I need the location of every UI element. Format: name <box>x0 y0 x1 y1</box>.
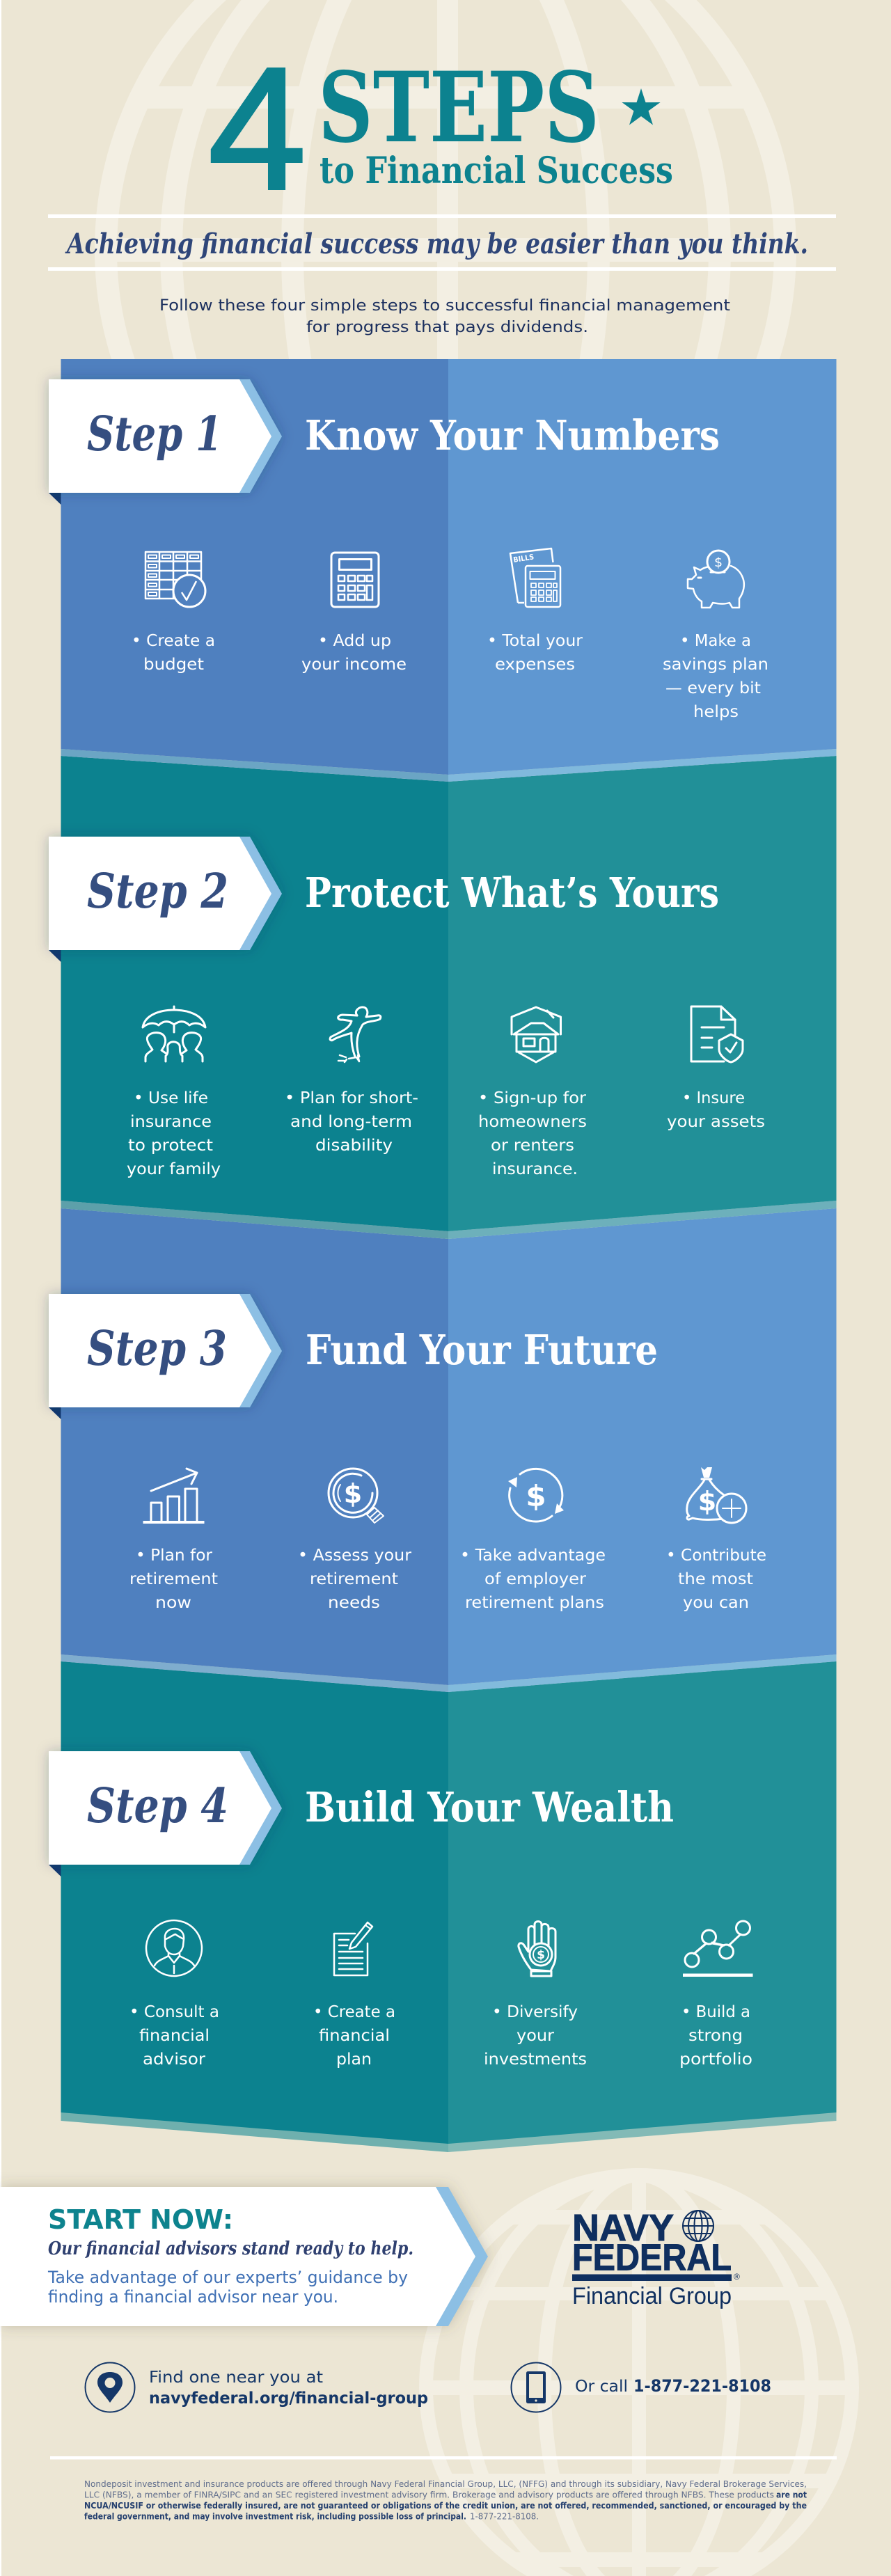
item: diversify your investments <box>484 1921 587 2069</box>
item: create a financial plan: • Create a <box>313 2003 395 2021</box>
background globe: top <box>95 0 796 359</box>
item: assess your retirement needs: • Assess your <box>298 1547 412 1565</box>
item: plan for disability: disability <box>315 1137 393 1155</box>
item: take advantage of employer retirement plans: retirement plans <box>465 1594 604 1612</box>
title: STEPS <box>318 50 599 164</box>
item: total your expenses: expenses <box>495 656 575 674</box>
disclosure fine print: are not <box>776 2489 807 2500</box>
disclosure fine print: NCUA/NCUSIF or otherwise federally insured, are not guaranteed or obligations of the credit union, are not offered, recommended, sanctioned, or encouraged by the <box>84 2500 807 2511</box>
disclosure fine print: Nondeposit investment and insurance products are offered through Navy Federal Financial Group, LLC, (NFFG) and through its subsidiary, Navy Federal Brokerage Services, <box>84 2479 807 2489</box>
item: insure your assets: your assets <box>667 1113 765 1131</box>
step 3 banner: Step 3 <box>87 1321 227 1377</box>
icon: line chart <box>683 1921 753 1977</box>
contact: find advisor <box>85 2362 428 2412</box>
item: plan for disability <box>285 1007 418 1155</box>
icon: map pin <box>85 2362 135 2412</box>
heading: know your numbers: Know Your Numbers <box>305 411 720 459</box>
intro text: Follow these four simple steps to successful financial management <box>159 297 730 315</box>
icon: document with shield <box>691 1006 743 1062</box>
icon: document and pencil <box>334 1922 372 1975</box>
item: add up your income <box>301 553 407 674</box>
heading: build your wealth: Build Your Wealth <box>305 1783 674 1831</box>
step 4 banner <box>49 1751 282 1876</box>
title: 4 <box>208 31 306 226</box>
icon: star <box>622 88 661 125</box>
panel: step 2 protect what's yours <box>49 756 837 1239</box>
item: use life insurance: to protect <box>128 1137 213 1155</box>
item: homeowners or renters insurance: • Sign-up for <box>478 1089 587 1107</box>
start now body: finding a financial advisor near you. <box>48 2287 338 2307</box>
title <box>208 31 673 226</box>
item: take advantage of employer retirement plans <box>460 1469 606 1612</box>
contact: phone <box>511 2362 771 2412</box>
item: make a savings plan: • Make a <box>680 632 751 650</box>
logo: navy federal financial group: FEDERAL <box>572 2237 732 2279</box>
disclosure fine print: LLC (NFBS), a member of FINRA/SIPC and an SEC registered investment advisory firm. Brokerage and advisory products are offered through NFBS. These products <box>84 2489 774 2500</box>
item: diversify your investments: investments <box>484 2050 587 2069</box>
item: contribute the most you can <box>666 1467 766 1612</box>
icon: magnifying glass with dollar <box>329 1469 384 1523</box>
icon: budget grid with check <box>145 552 205 607</box>
contact: find advisor: Find one near you at <box>149 2369 323 2387</box>
item: contribute the most you can: the most <box>678 1570 753 1588</box>
icon: bills and calculator <box>510 548 560 607</box>
item: consult a financial advisor <box>129 1920 219 2069</box>
disclosure fine print: 1-877-221-8108. <box>470 2511 539 2521</box>
icon: logo globe <box>683 2211 713 2241</box>
item: create a financial plan: financial <box>319 2027 390 2045</box>
item: add up your income: • Add up <box>318 632 391 650</box>
item: use life insurance: • Use life <box>134 1089 208 1107</box>
item: take advantage of employer retirement plans: of employer <box>484 1570 587 1588</box>
disclosure fine print: federal government, and may involve investment risk, including possible loss of principal. <box>84 2511 466 2521</box>
background globe: bottom <box>418 2175 863 2576</box>
panel: start now call to action <box>0 2187 488 2326</box>
panel: step 3 fund your future <box>49 1208 837 1692</box>
contact: phone: 1-877-221-8108 <box>633 2376 771 2396</box>
icon: money bag with plus <box>687 1467 746 1523</box>
step 1 banner: Step 1 <box>87 406 222 462</box>
item: add up your income: your income <box>301 656 407 674</box>
item: consult a financial advisor: advisor <box>143 2050 206 2069</box>
step 3 banner <box>49 1294 282 1419</box>
item: build a strong portfolio: • Build a <box>681 2003 750 2021</box>
tagline with rules <box>48 214 836 271</box>
icon: mobile phone <box>511 2362 561 2412</box>
icon: rising bar chart <box>143 1469 205 1524</box>
item: make a savings plan: helps <box>693 703 739 721</box>
item: homeowners or renters insurance: or renters <box>491 1137 574 1155</box>
item: create a budget: budget <box>143 656 204 674</box>
item: take advantage of employer retirement plans: • Take advantage <box>460 1547 606 1565</box>
start now body: Take advantage of our experts’ guidance by <box>47 2268 408 2287</box>
item: plan for disability: • Plan for short- <box>285 1089 418 1107</box>
item: use life insurance: your family <box>127 1160 221 1178</box>
item: create a financial plan: plan <box>336 2050 372 2069</box>
item: make a savings plan: $ <box>714 555 723 570</box>
item: homeowners or renters insurance <box>478 1007 587 1178</box>
item: create a budget <box>132 552 215 674</box>
start now heading: START NOW: <box>48 2204 233 2235</box>
item: diversify your investments: your <box>517 2027 555 2045</box>
item: assess your retirement needs: $ <box>344 1478 362 1509</box>
step 1 banner <box>49 379 282 505</box>
contact: find advisor: navyfederal.org/financial-group <box>149 2389 428 2408</box>
item: plan for retirement now: now <box>155 1594 191 1612</box>
item: create a budget: • Create a <box>132 632 215 650</box>
logo: navy federal financial group: Financial Group <box>572 2283 732 2309</box>
item: plan for disability: and long-term <box>290 1113 412 1131</box>
item: use life insurance: insurance <box>130 1113 212 1131</box>
item: contribute the most you can: • Contribute <box>666 1547 766 1565</box>
item: plan for retirement now: • Plan for <box>136 1547 213 1565</box>
icon: piggy bank with coin <box>688 551 744 608</box>
logo: navy federal financial group: ® <box>734 2272 740 2282</box>
step 2 banner <box>49 837 282 962</box>
panel: step 1 know your numbers <box>49 359 837 782</box>
start now subheading: Our financial advisors stand ready to help. <box>48 2238 413 2259</box>
item: homeowners or renters insurance: insurance. <box>492 1160 578 1178</box>
item: contribute the most you can: $ <box>698 1486 716 1517</box>
item: contribute the most you can: you can <box>683 1594 749 1612</box>
item: build a strong portfolio: strong <box>688 2027 743 2045</box>
item: plan for retirement now <box>129 1469 218 1612</box>
item: insure your assets: • Insure <box>682 1089 745 1107</box>
disclosure fine print <box>84 2479 807 2521</box>
item: insure your assets <box>667 1006 765 1131</box>
start now body <box>47 2268 408 2307</box>
item: assess your retirement needs <box>298 1469 412 1612</box>
item: consult a financial advisor: financial <box>139 2027 210 2045</box>
contact: phone: Or call <box>575 2378 628 2396</box>
item: make a savings plan: — every bit <box>665 679 761 697</box>
title: to Financial Success <box>320 150 673 192</box>
item: total your expenses: BILLS <box>513 553 535 564</box>
heading: fund your future: Fund Your Future <box>306 1326 658 1374</box>
item: total your expenses: • Total your <box>487 632 583 650</box>
item: make a savings plan <box>663 551 768 721</box>
icon: slipping figure <box>330 1007 381 1062</box>
icon: umbrella over family <box>143 1006 205 1061</box>
item: assess your retirement needs: needs <box>328 1594 380 1612</box>
logo: navy federal financial group <box>572 2207 740 2309</box>
icon: dollar cycle <box>508 1469 564 1522</box>
item: total your expenses <box>487 548 583 674</box>
icon: house in shield <box>512 1007 561 1062</box>
step 2 banner: Step 2 <box>87 864 228 919</box>
intro text <box>159 297 730 336</box>
logo: navy federal financial group: NAVY <box>572 2207 674 2249</box>
step 4 banner: Step 4 <box>87 1778 228 1834</box>
item: take advantage of employer retirement plans: $ <box>526 1479 546 1513</box>
item: build a strong portfolio <box>679 1921 753 2069</box>
intro text: for progress that pays dividends. <box>306 318 588 336</box>
panel: step 4 build your wealth <box>49 1661 837 2152</box>
item: build a strong portfolio: portfolio <box>679 2050 752 2069</box>
item: consult a financial advisor: • Consult a <box>129 2003 219 2021</box>
item: assess your retirement needs: retirement <box>310 1570 398 1588</box>
item: diversify your investments: • Diversify <box>492 2003 578 2021</box>
item: create a financial plan <box>313 1922 395 2069</box>
item: use life insurance <box>127 1006 221 1178</box>
heading: protect what's yours: Protect What’s Yours <box>305 869 719 917</box>
item: diversify your investments: $ <box>537 1948 545 1962</box>
item: homeowners or renters insurance: homeowners <box>478 1113 587 1131</box>
item: make a savings plan: savings plan <box>663 656 768 674</box>
icon: advisor <box>146 1920 202 1976</box>
icon: calculator <box>331 553 379 607</box>
item: plan for retirement now: retirement <box>129 1570 218 1588</box>
icon: hand with coin <box>519 1921 555 1976</box>
